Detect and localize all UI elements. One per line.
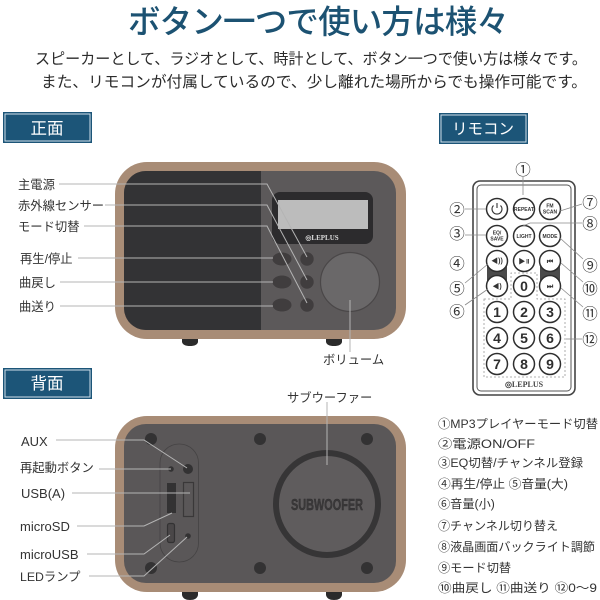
microsd slot: [167, 483, 176, 513]
function button text: [490, 204, 558, 290]
foot right: [326, 339, 342, 346]
function button text: ◀): [492, 282, 502, 290]
back labels: LEDランプ: [20, 570, 81, 584]
remote logo: ◎LEPLUS: [505, 380, 544, 389]
front view of radio: [115, 162, 406, 346]
volume knob: [320, 252, 380, 312]
function button text: FM: [546, 204, 554, 210]
section heading: front: 正面: [30, 120, 64, 138]
back labels: [20, 390, 372, 584]
section heading: front: [4, 112, 92, 142]
wood body: [115, 416, 406, 592]
back view of radio: [115, 416, 406, 600]
number buttons: 8: [520, 356, 528, 372]
foot left: [182, 592, 198, 600]
function button text: EQ/: [493, 230, 502, 236]
wood body: [115, 162, 406, 339]
back labels: サブウーファー: [287, 390, 372, 405]
section heading: back: 背面: [30, 374, 64, 393]
function button text: SCAN: [543, 210, 557, 216]
function buttons: [486, 198, 560, 296]
dashed number area: [484, 273, 565, 377]
title: ボタン一つで使い方は様々: [128, 4, 509, 40]
front labels: [18, 178, 384, 367]
aux jack: [183, 464, 193, 474]
display bezel: [272, 192, 373, 244]
remote callout numbers: ⑧: [582, 215, 598, 233]
remote callout numbers: ⑤: [449, 280, 465, 298]
function legend list: ②電源ON/OFF: [438, 437, 535, 451]
remote callout numbers: ⑦: [582, 194, 598, 212]
remote callout numbers: ④: [449, 255, 465, 273]
number buttons: 6: [546, 330, 554, 346]
front labels: モード切替: [18, 220, 80, 234]
function button text: REPEAT: [514, 207, 534, 213]
section heading: back: [4, 368, 92, 398]
function legend list: ⑧液晶画面バックライト調節: [438, 540, 595, 554]
remote callout numbers: ⑪: [582, 305, 598, 323]
volume rocker: [487, 261, 507, 286]
function legend list: ⑥音量(小): [438, 497, 495, 511]
function legend list: ⑦チャンネル切り替え: [438, 519, 558, 533]
number buttons: 1: [493, 304, 501, 320]
remote callout lines: [465, 177, 583, 339]
front labels: ボリューム: [323, 353, 384, 367]
number buttons: 5: [520, 330, 528, 346]
function button text: ⏭: [547, 284, 554, 290]
function button text: LIGHT: [516, 234, 532, 240]
function button text: ⏮: [547, 258, 554, 266]
subwoofer text: SUBWOOFER: [291, 497, 363, 514]
restart button: [168, 466, 174, 472]
number buttons: 0: [520, 278, 528, 294]
function legend list: [438, 417, 598, 595]
number buttons: 7: [493, 356, 501, 372]
number buttons: 4: [493, 330, 501, 346]
back callout lines: [56, 402, 327, 576]
port plate: [160, 444, 198, 562]
front labels: 赤外線センサー: [18, 198, 104, 213]
back panel: [124, 424, 396, 583]
section heading: remote: リモコン: [452, 121, 514, 138]
front labels: 曲戻し: [19, 276, 56, 290]
function button text: ◀)): [491, 257, 503, 265]
icon: power: [492, 203, 502, 214]
subwoofer: [276, 453, 378, 555]
back labels: 再起動ボタン: [20, 461, 94, 475]
description text: また、リモコンが付属しているので、少し離れた場所からでも操作可能です。: [41, 73, 587, 91]
description text: スピーカーとして、ラジオとして、時計として、ボタン一つで使い方は様々です。: [35, 50, 587, 68]
left buttons: [272, 252, 292, 312]
remote callout numbers: ②: [449, 201, 465, 219]
remote callout numbers: ⑫: [582, 331, 598, 349]
description text: [35, 50, 587, 91]
remote callout numbers: ⑩: [582, 280, 598, 298]
front labels: 曲送り: [19, 299, 56, 314]
remote body: [473, 181, 575, 395]
front labels: 再生/停止: [20, 252, 73, 266]
right buttons: [300, 252, 314, 312]
foot right: [326, 592, 342, 600]
remote callout numbers: ⑥: [449, 303, 465, 321]
function button text: SAVE: [490, 236, 504, 242]
function legend list: ③EQ切替/チャンネル登録: [438, 455, 583, 470]
number buttons: 2: [520, 304, 528, 320]
track rocker: [540, 261, 560, 286]
back labels: AUX: [21, 434, 48, 449]
function legend list: ④再生/停止 ⑤音量(大): [438, 477, 568, 491]
front callout lines: [59, 184, 350, 352]
usb a port: [184, 482, 194, 516]
back labels: microSD: [20, 519, 70, 534]
foot left: [182, 339, 198, 346]
lcd screen: [278, 200, 368, 229]
number buttons: [486, 278, 560, 374]
number buttons: 9: [546, 356, 554, 372]
number buttons: 3: [546, 304, 554, 320]
remote callout numbers: ①: [515, 161, 531, 179]
microusb port: [168, 524, 174, 542]
back labels: USB(A): [21, 486, 65, 501]
section heading: remote: [440, 114, 528, 144]
function legend list: ①MP3プレイヤーモード切替: [438, 417, 598, 431]
led lamp: [185, 533, 191, 539]
remote control: [473, 181, 575, 395]
function legend list: ⑩曲戻し ⑪曲送り ⑫0～9: [438, 580, 597, 595]
front labels: 主電源: [18, 178, 55, 192]
logo: ◎LEPLUS: [305, 234, 339, 242]
speaker grille: [124, 171, 261, 330]
function button text: ▶॥: [518, 258, 530, 266]
remote callout numbers: ③: [449, 225, 465, 243]
function button text: MODE: [542, 234, 558, 240]
remote callout numbers: [449, 161, 598, 349]
function legend list: ⑨モード切替: [438, 561, 511, 575]
screws: [145, 433, 373, 574]
back labels: microUSB: [20, 547, 79, 562]
front control panel: [124, 171, 396, 330]
remote callout numbers: ⑨: [582, 257, 598, 275]
